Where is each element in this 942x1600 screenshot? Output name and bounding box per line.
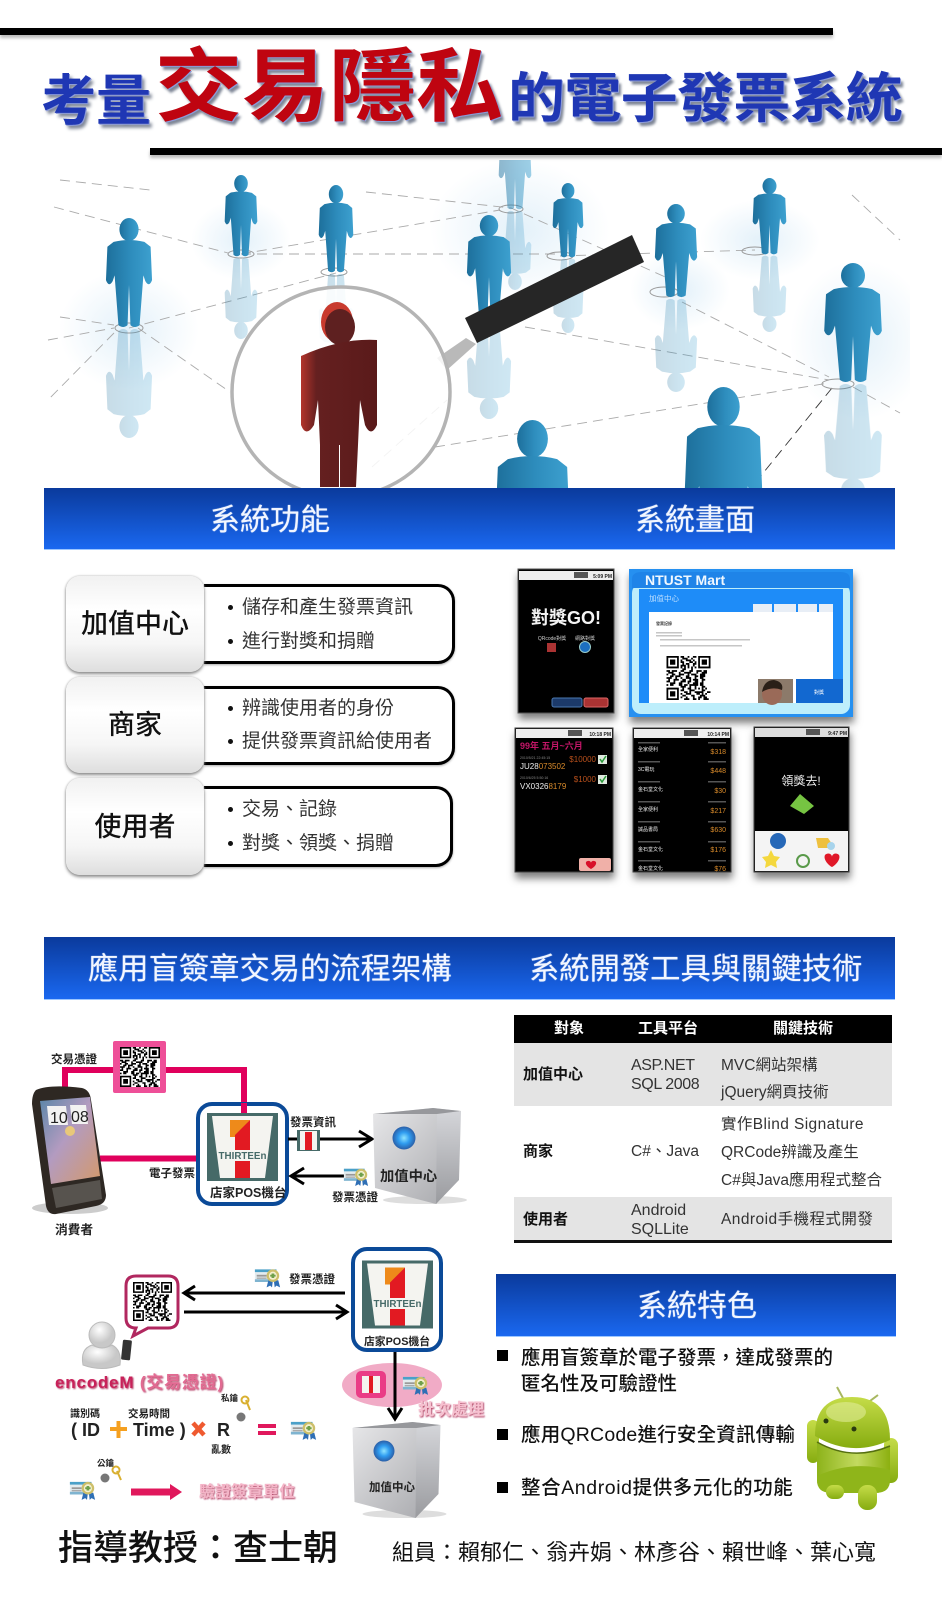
band heading: 系統畫面: 系統畫面 [635,504,755,537]
table bottom rule [514,1240,892,1243]
bullet: 辨識使用者的身份 [242,698,394,719]
technology: QRCode辨識及產生 [721,1144,859,1161]
phone screen: 發票清單: $630 [710,827,726,834]
phone screen: 中獎發票: 10:18 PM [589,732,611,738]
section band: flow / tools [44,937,895,1000]
formula: 私鑰 [221,1393,239,1403]
phone screen: 中獎發票 [515,728,613,872]
label: 發票憑證: 發票憑證 [332,1190,378,1204]
marker [497,1482,508,1493]
row: 加值中心 [514,1043,892,1106]
technology [720,1056,829,1101]
arrow: invoice info to value centre [288,1130,372,1151]
function text box: 商家 [204,686,455,765]
icon: android robot [807,1386,898,1510]
technology: MVC網站架構 [721,1057,817,1074]
feature list [497,1347,833,1499]
arrow to verifier [131,1484,182,1500]
phone screen: 發票清單: $76 [714,866,726,873]
phone screen: 發票清單 [633,728,731,873]
icon: smartphone: 08 [71,1109,89,1126]
title part: 的電子發票系統: 的電子發票系統 [508,69,902,129]
certificate and label: 發票憑證 [289,1272,335,1286]
platform [631,1057,699,1093]
card label: 商家 [108,710,162,740]
formula: Time ) [133,1420,186,1440]
web screen: NTUST Mart: 發票記錄 [656,620,672,626]
icon: smartphone: 10 [50,1110,68,1127]
certificate and label [255,1269,335,1287]
function card: 商家 [66,677,204,773]
phone screen: 對獎GO: 網路對獎 [575,635,595,642]
phone screen: 中獎發票: 2010/6/25 5:50:16 [520,776,548,780]
flow diagram 1: consumer, POS, value centre [32,1041,467,1237]
phone screen: 中獎發票: $1000 [574,775,597,784]
technology: 實作Blind Signature [721,1116,864,1133]
phone screen: 發票清單: $30 [714,788,726,795]
phone screen: 發票清單: 全家便利 [638,806,658,813]
platform: Android [631,1202,686,1219]
panel: system functions [64,574,456,880]
icon: value centre server [352,1422,446,1518]
band heading: 應用盲簽章交易的流程架構: 應用盲簽章交易的流程架構 [88,953,452,986]
web screen: NTUST Mart: 加值中心 [649,593,679,603]
red highlighted person [301,302,377,487]
target: 加值中心 [523,1066,583,1083]
band heading: 系統特色 [637,1290,757,1323]
feature 1: 應用盲簽章於電子發票，達成發票的 [521,1347,833,1369]
standing people [106,160,882,488]
phone screen: 中獎發票: $10000 [569,755,597,764]
row: 使用者 [514,1197,892,1240]
POS terminal [353,1249,441,1350]
marker [497,1350,508,1361]
function card: 使用者 [66,778,204,875]
phone screen: 發票清單: $318 [710,749,726,756]
bullet: 對獎、領獎、捐贈 [242,833,394,854]
label: 交易憑證: 交易憑證 [51,1052,97,1066]
pink connector lines [65,1070,244,1158]
formula: R [217,1420,230,1440]
technology [721,1116,882,1189]
label: 發票資訊: 發票資訊 [290,1115,336,1129]
icon: value centre server [373,1108,467,1204]
formula [70,1393,316,1500]
team members: 組員：賴郁仁、翁卉娟、林彥谷、賴世峰、葉心寬 [392,1540,876,1565]
header cell: 關鍵技術 [773,1020,833,1037]
marker [497,1429,508,1440]
section band: 系統功能 / 系統畫面 [44,488,895,550]
POS terminal: THIRTEEn [374,1299,421,1310]
advisor credit: 指導教授：查士朝 [58,1529,338,1568]
card label: 使用者 [94,812,176,842]
phone screen: 中獎發票: 2010/5/21 22:45:15 [520,756,550,760]
POS terminal: THIRTEEn [219,1151,266,1162]
speech bubble with QR [126,1276,178,1336]
phone screen: 中獎發票: VX03268179 [520,782,567,791]
bullet: 交易、記錄 [242,799,337,820]
flow diagram 2: blind signature [55,1247,486,1518]
title part: 考量: 考量 [41,70,151,132]
formula: 交易時間 [128,1407,170,1420]
web screen: NTUST Mart [629,569,853,717]
arrow: certificate back to POS [291,1168,368,1186]
phone screen: 發票清單: $176 [710,847,726,854]
feature 3: 整合Android提供多元化的功能 [521,1477,793,1499]
row: 商家 [514,1106,892,1197]
platform [631,1202,689,1238]
phone screen: 發票清單: $448 [710,768,726,775]
web screen: NTUST Mart: NTUST Mart [645,572,725,588]
phone screen: 發票清單: 10:14 PM [707,732,729,738]
magnifying glass [232,235,644,497]
phone screen: 發票清單: 誠品書局 [638,826,658,833]
bullet: 提供發票資訊給使用者 [242,731,432,752]
label: 電子發票: 電子發票 [149,1166,195,1180]
icon: value centre server: 加值中心 [369,1480,415,1494]
bullet: 進行對獎和捐贈 [242,631,375,652]
formula: ( ID [71,1420,100,1440]
band heading: 系統功能: 系統功能 [210,504,330,537]
phone screen: 對獎GO: 5:09 PM [593,574,612,580]
title [41,43,906,132]
phone screen: 領獎去: 9:47 PM [828,731,847,737]
phone screen: 對獎GO: 對獎GO! [531,607,601,628]
band heading: 系統開發工具與關鍵技術: 系統開發工具與關鍵技術 [529,953,862,986]
label: encodeM: encodeM (交易憑證) [55,1372,224,1392]
feature 1: 匿名性及可驗證性 [521,1373,677,1395]
feature 2: 應用QRCode進行安全資訊傳輸 [521,1424,795,1446]
platform: ASP.NET [631,1057,695,1074]
QR token [113,1041,166,1093]
phone screen: 對獎GO: QRcode對獎 [538,635,566,642]
arrow down to value centre [388,1352,402,1419]
formula: 亂數 [211,1443,231,1456]
top rule [0,28,833,35]
target: 使用者 [523,1211,568,1228]
phone screen: 中獎發票: JU28073502 [520,762,566,771]
phone screen: 發票清單: 金石堂文化 [638,786,663,793]
platform: SQL 2008 [631,1076,699,1093]
technology: Android手機程式開發 [721,1211,873,1228]
card label: 加值中心 [81,609,189,639]
technology: C#與Java應用程式整合 [721,1172,882,1189]
POS terminal [198,1103,287,1204]
phone screen: 發票清單: 3C電玩 [638,767,654,773]
function text box: 使用者 [204,786,453,867]
phone screen: 中獎發票: 99年 五月~六月 [520,740,583,751]
phone screen: 發票清單: 全家便利 [638,746,658,753]
platform: C#、Java [631,1143,699,1160]
phone screen: 領獎去: 領獎去! [781,773,821,788]
bullet: 儲存和產生發票資訊 [242,597,413,618]
POS terminal: 店家POS機台 [364,1334,430,1348]
reflections [106,211,882,503]
section band: 系統特色 [496,1274,896,1337]
second rule [150,148,942,155]
phone screen: 發票清單: $217 [710,808,726,815]
feature 1 [521,1347,833,1395]
phone screen: 對獎GO [518,569,614,713]
web screen: NTUST Mart: 對獎 [814,689,824,696]
arrows between customer and POS [184,1286,347,1319]
table header [514,1015,892,1043]
formula: 識別碼 [70,1407,100,1420]
technology: jQuery網頁技術 [721,1084,829,1101]
POS terminal: 店家POS機台 [210,1185,286,1200]
hero illustration: magnifier over network of people [48,160,910,488]
platform: SQLLite [631,1221,689,1238]
system screenshots [510,568,860,884]
title part: 交易隱私: 交易隱私 [155,43,503,132]
label: 批次處理: 批次處理 [418,1400,484,1419]
target: 商家 [523,1143,553,1160]
icon: smartphone [32,1086,108,1214]
icon: user with phone [82,1322,132,1368]
icon: value centre server: 加值中心 [380,1168,437,1185]
function text box: 加值中心 [204,584,455,664]
formula: 公鑰 [97,1458,115,1468]
batch ellipse with icons [342,1363,442,1407]
phone screen: 發票清單: 金石堂文化 [638,865,663,872]
phone screen: 領獎去 [754,727,849,872]
header cell: 工具平台 [638,1020,698,1037]
label: 消費者: 消費者 [55,1222,93,1237]
label: 驗證簽章單位: 驗證簽章單位 [199,1482,295,1501]
table: development tools [514,1015,892,1243]
header cell: 對象 [554,1020,584,1037]
phone screen: 發票清單: 金石堂文化 [638,846,663,853]
function card: 加值中心 [66,576,204,672]
